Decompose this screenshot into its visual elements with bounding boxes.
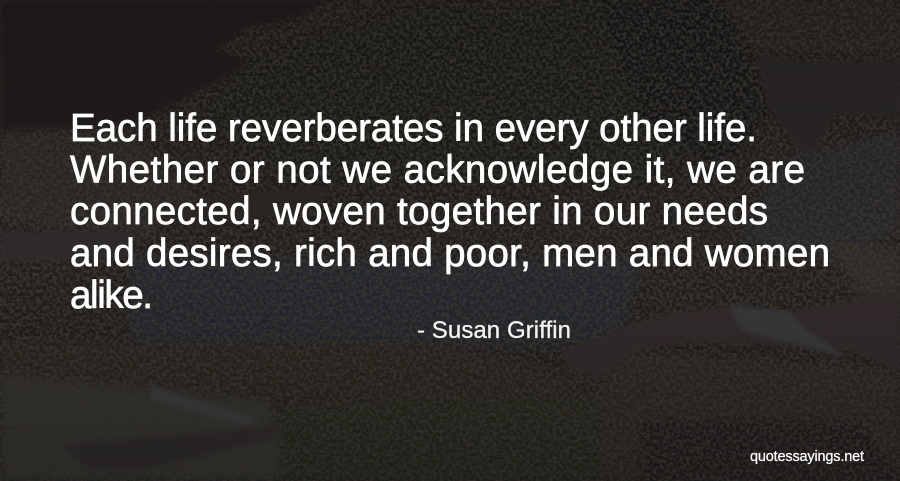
quote line 5: alike. xyxy=(70,274,153,317)
watermark: quotessayings.net xyxy=(750,449,864,465)
quote line 2: Whether or not we acknowledge it, we are xyxy=(70,148,805,192)
quote line 4: and desires, rich and poor, men and women xyxy=(70,232,830,275)
author attribution: - Susan Griffin xyxy=(417,317,571,344)
quote line 1: Each life reverberates in every other life. xyxy=(70,107,757,150)
quote line 3: connected, woven together in our needs xyxy=(70,190,768,233)
quote text xyxy=(70,107,830,317)
